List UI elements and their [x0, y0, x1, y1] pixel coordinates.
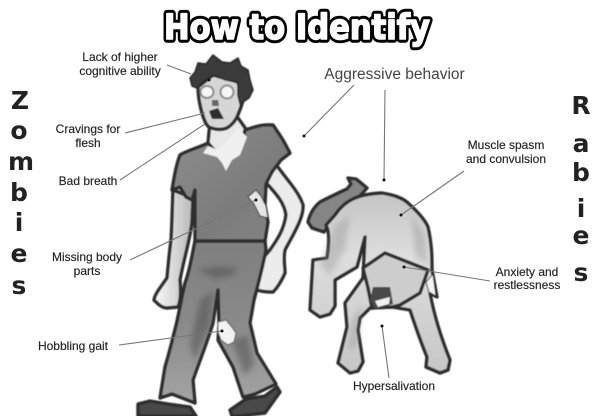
callout lines: rabies features — [304, 85, 490, 378]
vertical heading: Rabies: e — [573, 221, 589, 250]
label: cravings for flesh: Cravings for — [56, 122, 120, 136]
zombie trousers — [160, 241, 276, 403]
label: muscle spasm and convulsion: Muscle spasm — [468, 138, 544, 152]
zombie eyes — [200, 86, 234, 98]
label: cravings for flesh: flesh — [75, 136, 101, 150]
zombie right arm — [253, 163, 303, 292]
label: aggressive behavior: Aggressive behavior — [324, 66, 465, 83]
label: missing body parts: Missing body — [52, 250, 122, 264]
vertical heading: Zombies: b — [10, 178, 28, 207]
zombie head — [198, 75, 243, 129]
vertical heading: Zombies: e — [11, 239, 27, 268]
zombie left arm — [154, 190, 193, 308]
label: bad breath: Bad breath — [59, 174, 117, 188]
vertical heading: Rabies: s — [574, 258, 588, 287]
label: lack of higher cognitive ability: Lack of higher — [82, 50, 158, 64]
dog tail — [308, 178, 367, 232]
label: hobbling gait: Hobbling gait — [38, 339, 109, 353]
vertical heading: Zombies: m — [8, 147, 34, 176]
label: hypersalivation: Hypersalivation — [353, 379, 435, 393]
dog shading — [320, 215, 428, 350]
illustration: dog — [308, 178, 450, 373]
zombie mouth — [209, 108, 224, 119]
label: anxiety and restlessness: Anxiety and — [496, 265, 558, 279]
label: anxiety and restlessness: restlessness — [494, 278, 560, 292]
callout lines: zombie features — [119, 65, 256, 345]
vertical heading: Zombies: Z — [11, 86, 29, 115]
zombie neck — [196, 118, 248, 160]
zombie trousers shading — [190, 266, 254, 375]
dog right ear — [426, 274, 436, 296]
vertical heading: Zombies: o — [10, 116, 28, 145]
zombie left shoe — [138, 401, 196, 416]
title: How to Identify — [164, 8, 430, 48]
zombie shirt — [172, 125, 290, 241]
zombie torso tear — [248, 190, 268, 218]
vertical heading: Zombies: i — [15, 208, 23, 237]
zombie knee hole — [218, 320, 236, 345]
label: lack of higher cognitive ability: cognitive ability — [79, 64, 161, 78]
vertical heading: Rabies: a — [573, 129, 589, 158]
title: How to Identify — [164, 8, 430, 48]
vertical heading: Rabies: i — [577, 194, 585, 223]
vertical heading: Zombies — [8, 86, 34, 300]
dog body — [310, 193, 450, 373]
vertical heading: Rabies: R — [571, 91, 591, 120]
zombie nose — [212, 100, 219, 106]
dog teeth — [375, 297, 390, 307]
vertical heading: Zombies: s — [12, 271, 26, 300]
zombie hair — [190, 55, 253, 108]
dog head — [363, 253, 428, 308]
illustration: zombie — [138, 55, 303, 416]
callout endpoints — [208, 78, 406, 332]
zombie right shoe — [230, 387, 280, 416]
vertical heading: Rabies: b — [572, 158, 590, 187]
vertical heading: Rabies — [571, 91, 591, 287]
zombie torn collar — [203, 128, 247, 171]
dog muzzle — [370, 287, 393, 309]
label: missing body parts: parts — [74, 264, 100, 278]
label: muscle spasm and convulsion: and convulsion — [466, 152, 546, 166]
